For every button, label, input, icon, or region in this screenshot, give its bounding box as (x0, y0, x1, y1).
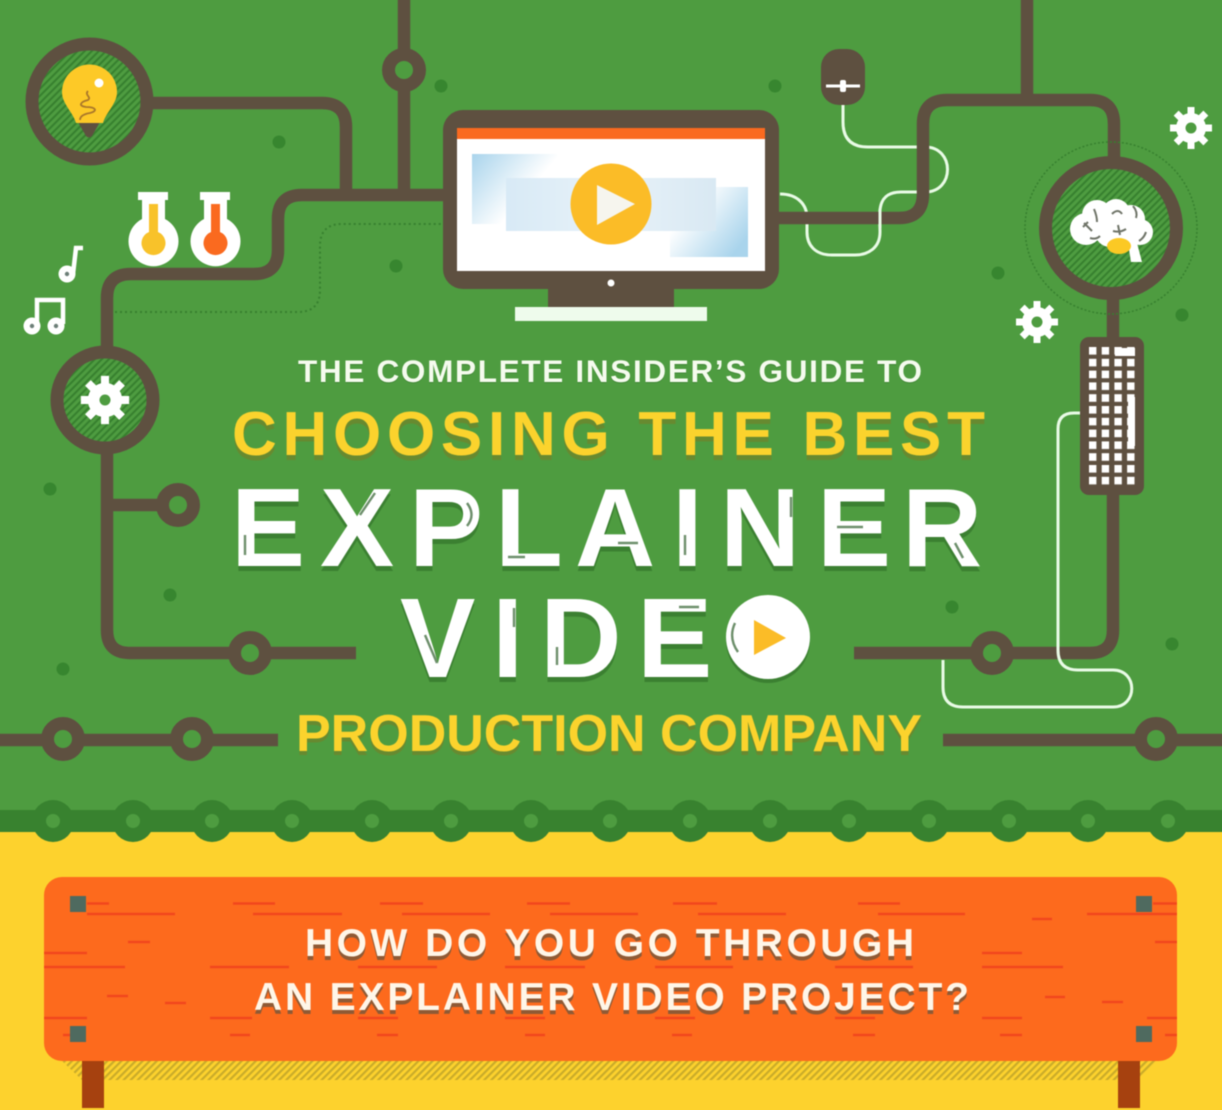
panel: wooden sign (44, 877, 1177, 1108)
sign question: AN EXPLAINER VIDEO PROJECT? (254, 976, 969, 1019)
icon: music notes (24, 248, 83, 334)
background dots (44, 80, 1188, 676)
icon: yellow flask (128, 192, 178, 266)
circuit pipes (0, 0, 1222, 740)
title: the complete insider's guide to: THE COMPLETE INSIDER’S GUIDE TO (298, 353, 922, 389)
icon: brain (1025, 142, 1197, 314)
title: explainer: EXPLAINER (231, 466, 982, 590)
icon: keyboard with cable (943, 337, 1144, 707)
icon: orange flask (190, 192, 240, 266)
sign post left (82, 1060, 104, 1108)
sign pins (70, 896, 1152, 1042)
sign board (44, 877, 1177, 1061)
icon: mouse (821, 49, 880, 228)
title: video: VIDE (400, 575, 712, 701)
mouse cable (780, 105, 948, 255)
sign question (254, 922, 969, 1019)
icon: light bulb (32, 44, 147, 159)
scalloped divider band (0, 800, 1222, 842)
sign question: HOW DO YOU GO THROUGH (305, 922, 914, 965)
icon: gear middle right (1016, 301, 1058, 343)
green background (0, 0, 1222, 832)
yellow background (0, 832, 1222, 1110)
sign post right (1118, 1060, 1140, 1108)
title: production company: PRODUCTION COMPANY (296, 705, 922, 763)
icon: monitor (443, 110, 779, 321)
pipe nodes (48, 54, 1172, 754)
icon: gear top right (1170, 107, 1212, 149)
icon: gear node (57, 352, 153, 448)
dotted trace (115, 224, 445, 312)
title: choosing the best: CHOOSING THE BEST (232, 400, 985, 469)
